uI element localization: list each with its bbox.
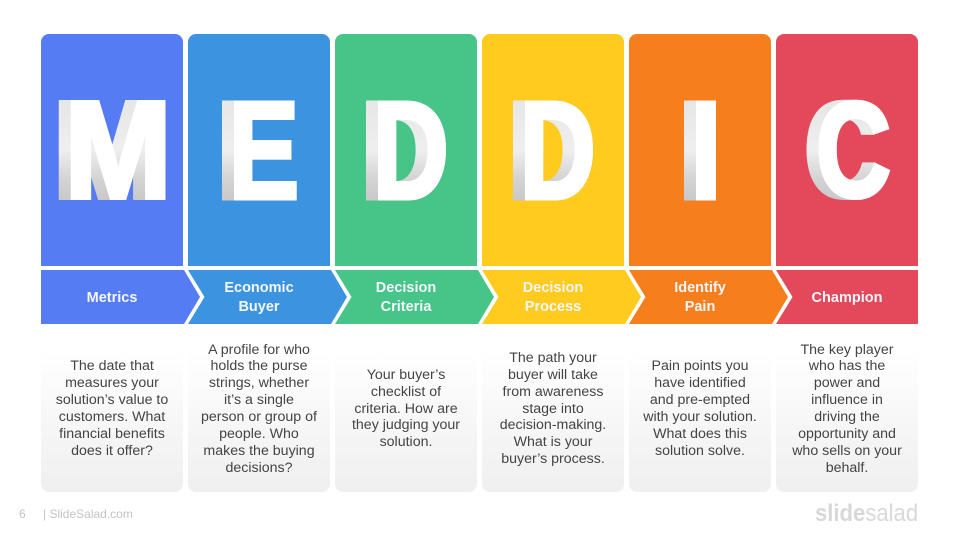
text: Economic Buyer description: decisions? [225, 460, 293, 476]
heading: Champion: Champion [812, 290, 882, 306]
text: Economic Buyer description: person or group of [201, 409, 317, 425]
text: Metrics description: solution’s value to [56, 392, 168, 408]
heading: Economic Buyer [224, 280, 294, 315]
heading: Identify Pain [674, 280, 726, 315]
heading: Decision Process [523, 280, 583, 315]
text: Metrics description: customers. What [59, 409, 165, 425]
text: Economic Buyer description: it’s a single [224, 392, 294, 408]
letter I: I [690, 73, 722, 229]
text: Decision Criteria description: they judging your [352, 417, 460, 433]
text: Decision Process description: The path your [509, 350, 597, 366]
text: Champion description: opportunity and [798, 426, 896, 442]
heading: Decision Process: Decision [523, 280, 583, 296]
text: Decision Criteria description [335, 326, 477, 492]
arrow: Champion [776, 270, 918, 324]
text: Identify Pain description: have identified [654, 375, 746, 391]
text: Champion description: influence in [811, 392, 883, 408]
text: Champion description: behalf. [826, 460, 868, 476]
text: Decision Process description: buyer’s process. [501, 451, 605, 467]
text: Champion description: who sells on your [792, 443, 902, 459]
panel: D colour block [335, 34, 477, 266]
text: Economic Buyer description: people. Who [219, 426, 299, 442]
text: Decision Process description: stage into [522, 401, 584, 417]
text: Decision Process description: buyer will take [508, 367, 598, 383]
panel: M colour block [41, 34, 183, 266]
text: Identify Pain description: solution solve. [655, 443, 745, 459]
heading: Decision Criteria: Criteria [381, 299, 431, 315]
heading: Economic Buyer: Economic [224, 280, 294, 296]
second letter D: D [519, 74, 596, 229]
text: Metrics description: financial benefits [59, 426, 165, 442]
text: Metrics description [41, 326, 183, 492]
text: Economic Buyer description: A profile for who [208, 342, 310, 358]
text: Champion description: power and [814, 375, 880, 391]
text: Economic Buyer description: makes the buying [203, 443, 315, 459]
text: Decision Criteria description: checklist of [371, 384, 441, 400]
panel: C colour block [776, 34, 918, 266]
heading: Economic Buyer: Buyer [238, 299, 280, 315]
arrow: Economic Buyer [188, 270, 347, 324]
text: Identify Pain description [629, 326, 771, 492]
text: Champion description [776, 326, 918, 492]
text: Identify Pain description: Pain points you [651, 358, 748, 374]
text: Champion description: who has the [809, 358, 885, 374]
text: Economic Buyer description: holds the purse [210, 358, 308, 374]
letter M: M [64, 72, 172, 228]
text: Decision Process description [482, 326, 624, 492]
text: Decision Process description: What is your [514, 434, 592, 450]
text: Decision Process description: from awareness [503, 384, 603, 400]
arrow: Decision Process [482, 270, 641, 324]
text: Metrics description: measures your [65, 375, 159, 391]
heading: Metrics: Metrics [87, 290, 137, 306]
heading: Decision Criteria: Decision [376, 280, 436, 296]
text: Decision Criteria description: Your buyer’s [367, 367, 445, 383]
footer site name: | SlideSalad.com [43, 507, 133, 521]
heading: Decision Criteria [376, 280, 436, 315]
panel: I colour block [629, 34, 771, 266]
text: Metrics description: The date that [70, 358, 154, 374]
text: Champion description: The key player [800, 342, 894, 358]
logo: slidesalad: slidesalad [815, 500, 918, 527]
text: Identify Pain description: and pre-empted [650, 392, 750, 408]
arrow: Metrics [41, 270, 200, 324]
text: Economic Buyer description: strings, whether [209, 375, 309, 391]
page number: 6 [19, 507, 26, 521]
text: Decision Criteria description: solution. [380, 434, 432, 450]
panel: second D colour block [482, 34, 624, 266]
text: Identify Pain description: What does this [653, 426, 747, 442]
panel: E colour block [188, 34, 330, 266]
arrow: Identify Pain [629, 270, 788, 324]
letter D: D [372, 74, 449, 229]
text: Identify Pain description: with your solution. [643, 409, 757, 425]
text: Economic Buyer description [188, 326, 330, 492]
letter C: C [816, 73, 891, 226]
letter E: E [228, 74, 299, 229]
heading: Decision Process: Process [525, 299, 581, 315]
heading: Identify Pain: Pain [685, 299, 715, 315]
text: Metrics description: does it offer? [71, 443, 153, 459]
text: Champion description: driving the [814, 409, 880, 425]
heading: Identify Pain: Identify [674, 280, 726, 296]
arrow: Decision Criteria [335, 270, 494, 324]
text: Decision Criteria description: criteria. How are [354, 401, 458, 417]
text: Decision Process description: decision-making. [500, 417, 606, 433]
